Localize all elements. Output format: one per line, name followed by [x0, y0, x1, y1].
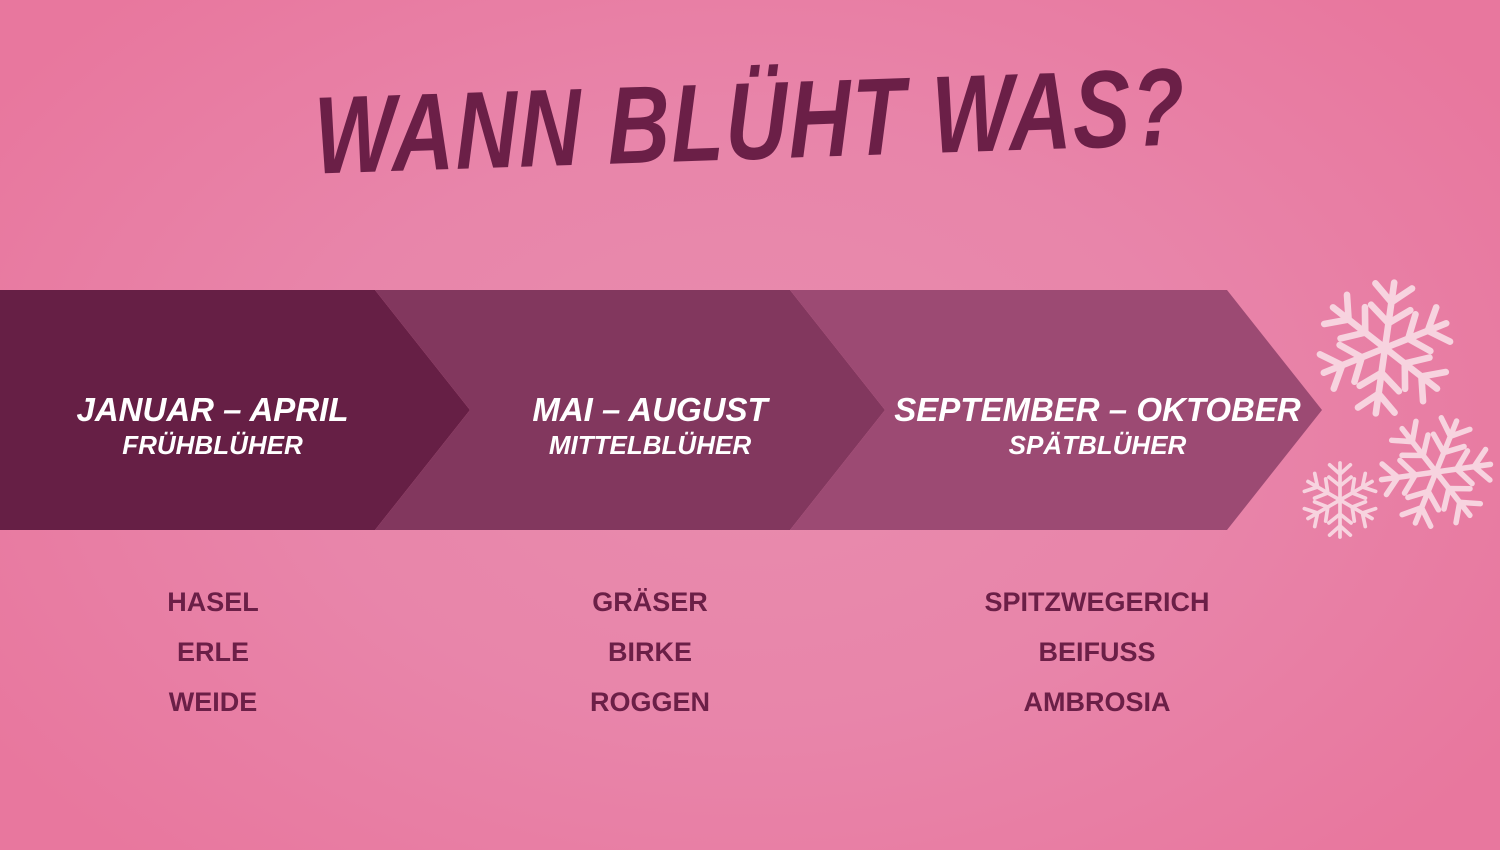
- label: September - Oktober: [894, 391, 1301, 460]
- label: Mai - August: MITTELBLÜHER: [549, 430, 751, 460]
- chevron: autumn: [790, 290, 1322, 530]
- list: early bloomers: HASEL: [167, 587, 259, 617]
- label: Mai - August: [532, 391, 770, 460]
- list: early bloomers: WEIDE: [169, 687, 257, 717]
- label: September - Oktober: SPÄTBLÜHER: [1009, 430, 1186, 460]
- list: early bloomers: ERLE: [177, 637, 249, 667]
- icon: small snowflake: [1302, 463, 1378, 537]
- icon: medium snowflake: [1364, 400, 1500, 544]
- list: late bloomers: BEIFUSS: [1038, 637, 1156, 667]
- label: Januar - April: JANUAR – APRIL: [76, 391, 348, 428]
- list: mid bloomers: GRÄSER: [592, 587, 708, 617]
- chevron: winter to spring: [0, 290, 470, 530]
- list: mid bloomers: ROGGEN: [590, 687, 710, 717]
- icon: large snowflake: [1309, 273, 1461, 423]
- list: mid bloomers: BIRKE: [608, 637, 692, 667]
- chevron: summer: [375, 290, 885, 530]
- list: late bloomers: SPITZWEGERICH: [984, 587, 1210, 617]
- list: late bloomers: [984, 587, 1210, 717]
- label: Januar - April: FRÜHBLÜHER: [122, 430, 303, 460]
- list: late bloomers: AMBROSIA: [1024, 687, 1170, 717]
- list: early bloomers: [167, 587, 259, 717]
- list: mid bloomers: [590, 587, 710, 717]
- label: Januar - April: [76, 391, 348, 460]
- title: WANN BLÜHT WAS?: [313, 45, 1187, 198]
- label: September - Oktober: SEPTEMBER – OKTOBER: [894, 391, 1301, 428]
- label: Mai - August: MAI – AUGUST: [532, 391, 768, 428]
